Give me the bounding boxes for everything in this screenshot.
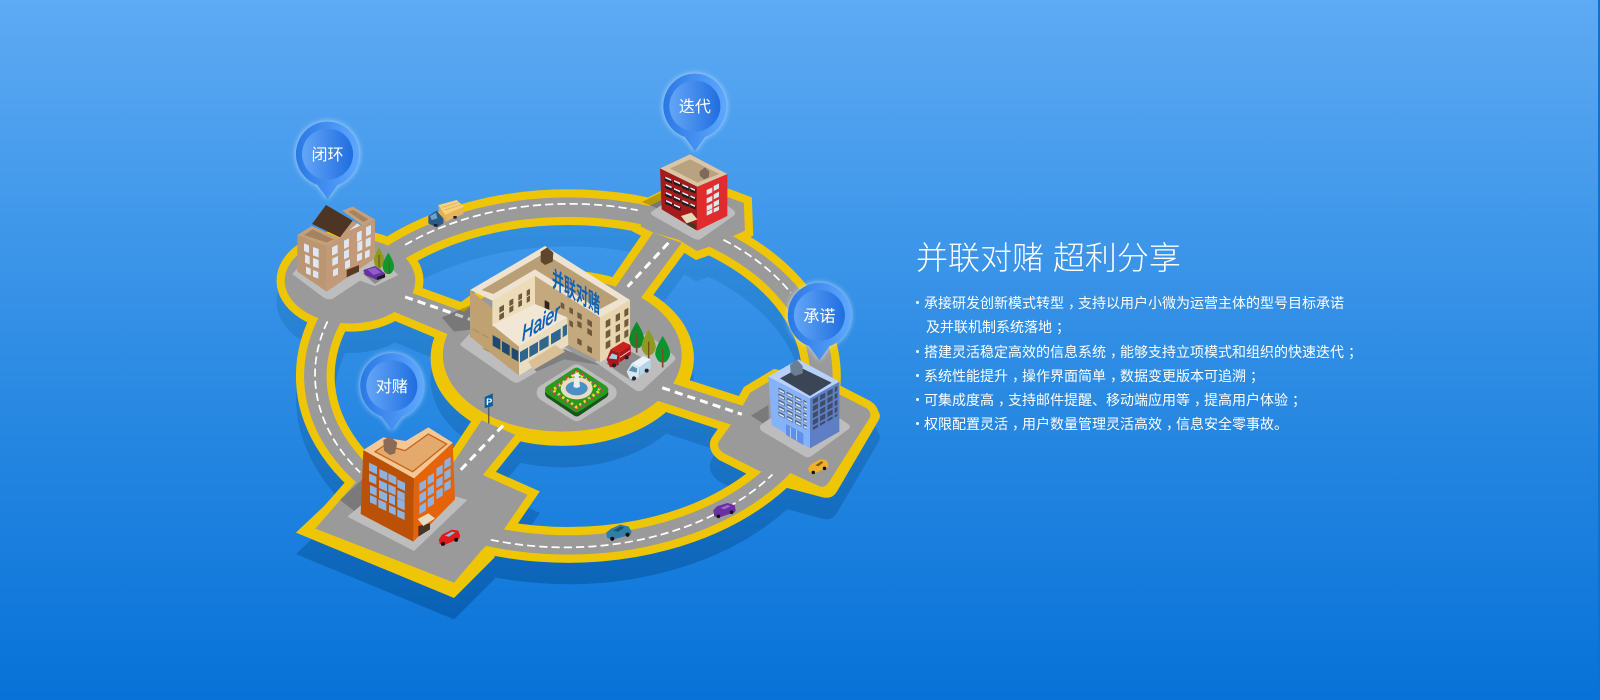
inner right wall — [535, 276, 600, 362]
building: closed-loop tan house with car and trees — [292, 205, 398, 299]
pin: closed loop — [296, 121, 359, 199]
bullet: R&D transformation: 承接研发创新模式转型 ，支持以用户小微为运营主体的型号目标承诺 — [924, 295, 1344, 311]
road network shadow — [285, 218, 880, 619]
rooftop hut — [383, 437, 397, 455]
pin: betting — [360, 353, 423, 431]
right end wall — [600, 300, 630, 362]
trees — [374, 247, 394, 274]
awning — [418, 513, 435, 526]
roof rim — [660, 154, 727, 187]
front upper wall — [492, 276, 535, 327]
lobby glass — [786, 424, 803, 445]
building shadows on road — [442, 192, 662, 332]
left wall — [361, 450, 414, 542]
roof rim — [363, 427, 453, 478]
white truck — [627, 356, 651, 380]
trees and trucks by headquarters — [606, 322, 670, 382]
car: teal blue — [606, 524, 632, 541]
roof rim — [768, 359, 839, 398]
left windows — [369, 463, 405, 520]
red truck — [607, 342, 631, 367]
roof inner — [482, 253, 618, 309]
right wall — [413, 443, 455, 542]
gray road surface — [285, 197, 870, 583]
roof sign: 并联对赌 — [552, 264, 600, 319]
roof inner — [375, 434, 447, 472]
doorway — [545, 300, 549, 312]
pin: promise — [788, 283, 851, 360]
plinth — [292, 250, 398, 299]
building: iteration red tower — [651, 154, 735, 240]
car: red — [439, 530, 460, 546]
rooftop hut — [790, 359, 803, 376]
bullet: integration: 可集成度高 ，支持邮件提醒、移动端应用等 ，提高用户体验 ； — [924, 392, 1306, 408]
left windows — [665, 177, 696, 211]
back wing roof — [342, 207, 375, 226]
left windows — [778, 387, 807, 430]
rooftop hut — [699, 167, 709, 179]
entrance right wall — [519, 317, 568, 376]
entrance shadow — [528, 349, 600, 372]
parking sign — [485, 393, 493, 423]
text panel — [916, 240, 1362, 432]
right windows — [332, 225, 371, 277]
bullet: information system: 搭建灵活稳定高效的信息系统 ，能够支持立项模式和组织的快速迭代 ； — [924, 344, 1362, 360]
entrance right windows — [520, 324, 567, 363]
fountain garden — [545, 370, 608, 413]
bullet: permissions: 权限配置灵活 ，用户数量管理灵活高效 ，信息安全零事故。 — [924, 416, 1288, 432]
building: betting orange tower — [340, 427, 467, 551]
bullet: performance: 系统性能提升 ，操作界面简单 ，数据变更版本可追溯 ； — [924, 368, 1264, 384]
tree trio — [629, 322, 670, 367]
left wall — [297, 235, 327, 292]
awning — [681, 213, 697, 223]
door — [418, 523, 430, 537]
central Haier headquarters area — [460, 246, 675, 413]
brick marks — [473, 328, 489, 352]
roof inner — [670, 159, 719, 183]
plinth — [760, 418, 850, 457]
right windows — [419, 457, 451, 514]
right wall — [810, 382, 839, 448]
pin: betting: 对赌 — [376, 378, 408, 396]
cast shadow — [751, 405, 769, 428]
door — [686, 220, 696, 230]
cast shadow — [340, 478, 363, 517]
right wall — [327, 219, 375, 292]
plinth — [651, 182, 735, 240]
entrance left windows — [493, 335, 518, 362]
purple car — [363, 266, 385, 280]
Haier logo: Haier — [522, 299, 560, 347]
door — [347, 265, 359, 277]
left wall — [660, 168, 697, 231]
pin: iteration: 迭代 — [679, 98, 711, 116]
building: promise blue tower — [751, 359, 850, 457]
right edge strip — [1598, 0, 1600, 700]
roof inner — [780, 367, 832, 396]
rooftop hut — [541, 247, 553, 265]
car: yellow taxi — [808, 459, 829, 474]
right wall — [697, 174, 727, 231]
small delivery truck on ring road — [428, 200, 464, 227]
upper windows — [499, 289, 628, 354]
car lot shadow — [363, 265, 386, 284]
pin: closed loop: 闭环 — [312, 146, 344, 164]
heading: 并联对赌 超利分享 — [916, 240, 1181, 276]
right windows — [813, 386, 837, 430]
plinth — [347, 497, 467, 551]
left wall — [768, 377, 810, 448]
entrance roof — [492, 304, 567, 347]
pin: iteration — [663, 73, 727, 151]
road dashed centre lines — [315, 204, 791, 547]
car: purple — [713, 503, 736, 518]
gable window — [349, 223, 360, 231]
left windows — [304, 243, 319, 279]
parking sign: P — [486, 397, 492, 407]
bullet continuation: 及并联机制系统落地 ； — [926, 319, 1070, 335]
central building plinths — [460, 330, 675, 391]
yellow road border — [285, 197, 880, 598]
left roof — [297, 226, 340, 246]
brown gable roof — [312, 205, 353, 237]
roof rim — [470, 246, 630, 317]
parking shadow — [606, 350, 650, 382]
left wall — [470, 290, 519, 376]
entrance canopy — [528, 345, 565, 370]
right windows — [707, 183, 719, 216]
pin: promise: 承诺 — [803, 307, 835, 325]
